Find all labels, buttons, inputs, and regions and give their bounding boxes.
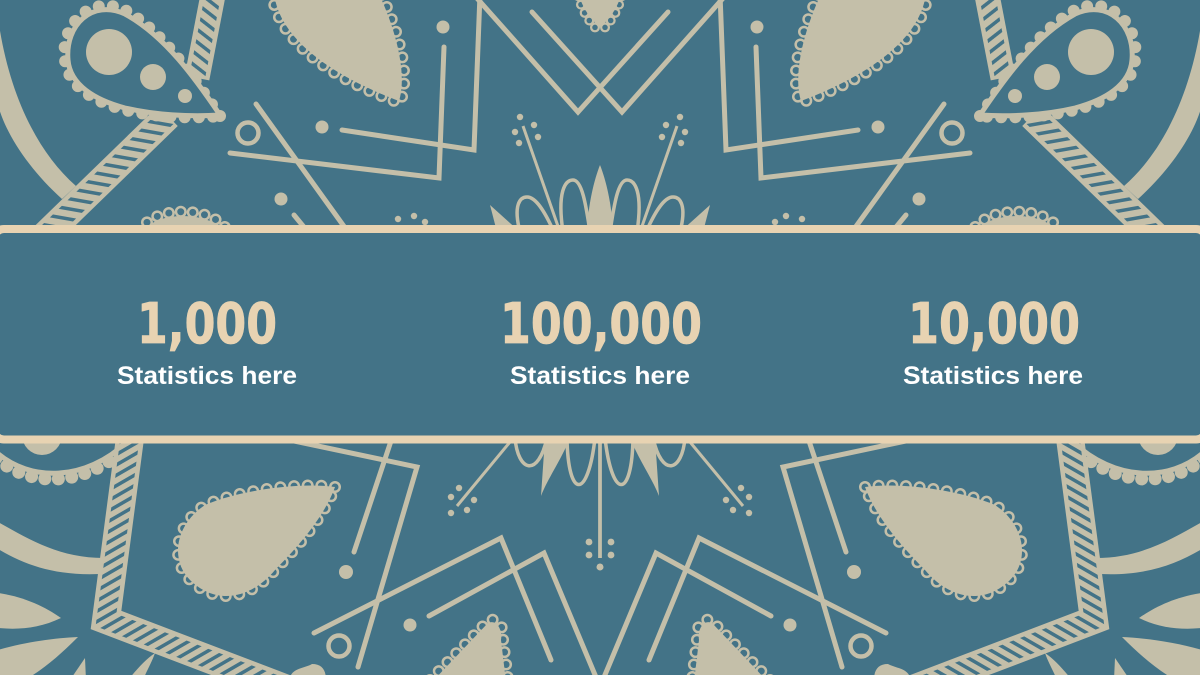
top centre drop bbox=[578, 0, 600, 32]
small paisley bottom bbox=[430, 620, 508, 675]
ring top bbox=[238, 122, 258, 144]
number 3: 10,000 bbox=[908, 292, 1080, 357]
bottom corner leaves bbox=[0, 593, 155, 675]
crossing line corners top bbox=[230, 0, 480, 232]
top hatched ribbon upper bbox=[197, 0, 213, 78]
label 3: Statistics here bbox=[903, 362, 1083, 390]
statistic 1 bbox=[117, 292, 297, 390]
filled paisley top bbox=[272, 0, 404, 103]
number 1: 1,000 bbox=[137, 292, 277, 357]
top hatched ribbon lower bbox=[30, 116, 168, 250]
bottom hatched frame bbox=[106, 438, 295, 675]
bottom flower bbox=[448, 438, 600, 558]
top V lines bbox=[475, 0, 668, 112]
ring bottom bbox=[328, 636, 350, 656]
small paisley dome top bbox=[140, 212, 228, 234]
dots top bbox=[274, 20, 450, 225]
dots bottom bbox=[339, 539, 603, 632]
mandala right half mirrored bbox=[532, 0, 1200, 675]
statistic 3 bbox=[903, 292, 1083, 390]
central band panel bbox=[0, 229, 1200, 440]
label 2: Statistics here bbox=[510, 362, 690, 390]
top curved band bbox=[0, 18, 76, 199]
bottom scalloped paisley arc bbox=[0, 415, 130, 479]
number 2: 100,000 bbox=[500, 292, 702, 357]
bottom curved band bbox=[0, 522, 104, 574]
filled paisley bottom bbox=[178, 486, 335, 596]
outlined paisley with dots bbox=[64, 6, 220, 117]
top flower bbox=[490, 114, 600, 232]
mandala left half bbox=[0, 0, 668, 675]
label 1: Statistics here bbox=[117, 362, 297, 390]
statistic 2 bbox=[500, 292, 702, 390]
crossing line corners bottom bbox=[280, 438, 598, 675]
small scalloped blob bottom bbox=[291, 664, 326, 675]
